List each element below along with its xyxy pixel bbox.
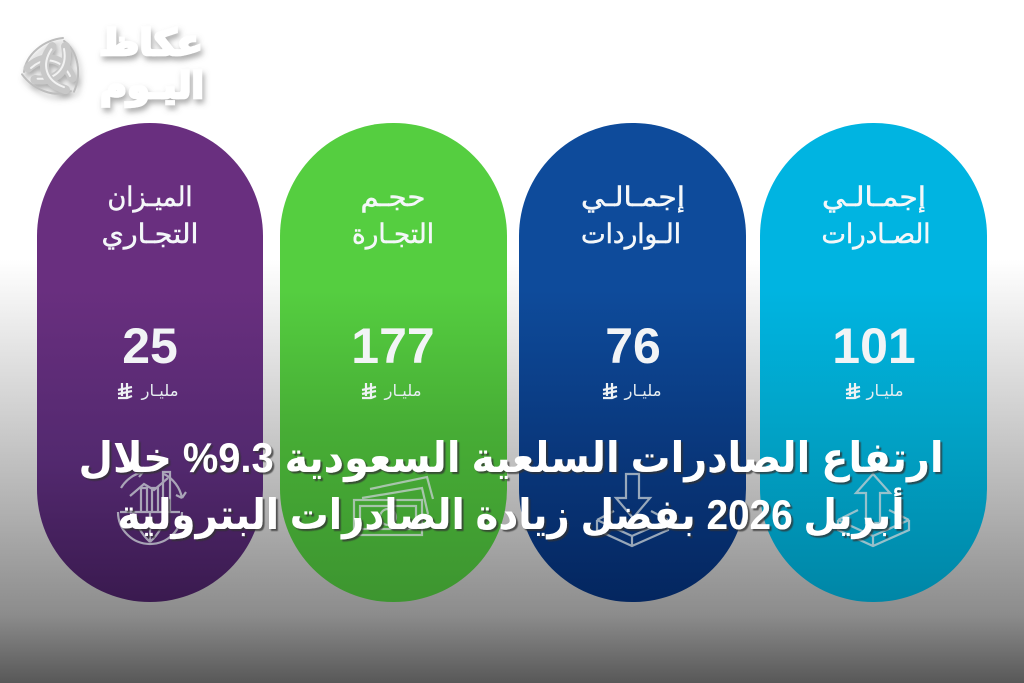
panel: total imports bbox=[519, 123, 746, 602]
unit: billion riyals: مليـار bbox=[865, 383, 904, 401]
value: 25: 25 bbox=[122, 318, 178, 374]
unit: billion riyals bbox=[362, 383, 422, 401]
heading: trade volume: التجـارة bbox=[352, 219, 434, 250]
heading: total imports: الـواردات bbox=[581, 219, 681, 250]
heading: trade balance bbox=[102, 182, 198, 250]
icon: banknotes bbox=[354, 477, 433, 535]
heading: total exports: إجمـالـي bbox=[822, 182, 926, 213]
icon: logo rings bbox=[18, 38, 93, 108]
logo bbox=[18, 22, 204, 108]
heading: total exports: الصـادرات bbox=[822, 219, 930, 250]
heading: total imports bbox=[581, 182, 685, 250]
title: ارتفاع الصادرات السلعية السعودية 9.3% خلال bbox=[78, 434, 944, 483]
heading: trade volume bbox=[352, 182, 434, 250]
title: أبريل 2026 بفضل زيادة الصادرات البترولية bbox=[118, 487, 904, 540]
heading: total imports: إجمـالـي bbox=[581, 182, 685, 213]
heading: trade balance: الميـزان bbox=[108, 182, 192, 213]
value: 101: 101 bbox=[832, 318, 916, 374]
title bbox=[78, 434, 944, 540]
icon: box with up arrow bbox=[838, 474, 909, 546]
icon: globe with chart bbox=[118, 470, 186, 544]
unit: billion riyals bbox=[603, 383, 662, 401]
value: 177: 177 bbox=[351, 318, 435, 374]
panel: trade volume bbox=[280, 123, 507, 602]
unit: billion riyals bbox=[846, 383, 904, 401]
logo wordmark bbox=[99, 22, 204, 107]
logo wordmark: اليـوم bbox=[100, 65, 204, 107]
unit: billion riyals: مليـار bbox=[140, 383, 178, 401]
unit: billion riyals bbox=[118, 383, 178, 401]
value: 76: 76 bbox=[605, 318, 661, 374]
panel: trade balance bbox=[37, 123, 263, 602]
icon: box with down arrow bbox=[597, 474, 668, 546]
unit: billion riyals: مليـار bbox=[383, 383, 422, 401]
logo wordmark: عكاظ bbox=[99, 22, 203, 63]
heading: trade volume: حجـم bbox=[360, 182, 426, 213]
heading: total exports bbox=[822, 182, 930, 250]
heading: trade balance: التجـاري bbox=[102, 219, 198, 250]
unit: billion riyals: مليـار bbox=[623, 383, 662, 401]
panel: total exports bbox=[760, 123, 987, 602]
